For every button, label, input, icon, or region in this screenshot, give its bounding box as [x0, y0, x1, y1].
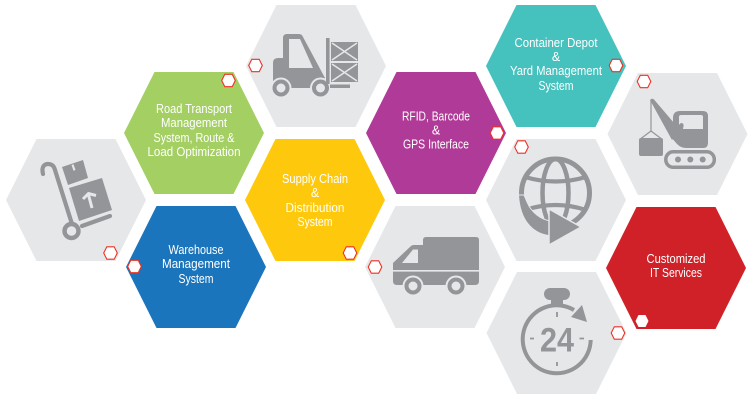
panel: 24 hour service [486, 272, 626, 394]
panel: forklift [246, 5, 386, 127]
marker [490, 127, 504, 139]
text: RFID barcode GPS: GPS Interface [403, 138, 469, 152]
text: supply chain and distribution system: System [298, 215, 332, 229]
text: warehouse management system: Warehouse [168, 243, 224, 257]
text: container depot and yard management: Container Depot [514, 36, 598, 50]
text: road transport management [148, 102, 241, 159]
icon: crane excavator [639, 98, 714, 167]
text: road transport management: Management [161, 116, 227, 130]
text: warehouse management system [162, 243, 230, 286]
panel: crane excavator [608, 73, 748, 195]
text: road transport management: System, Route & [154, 131, 235, 145]
marker [368, 261, 382, 273]
marker [249, 59, 262, 72]
text: container depot and yard management: System [538, 79, 574, 93]
panel: customized IT services [606, 207, 746, 329]
text: RFID barcode GPS: RFID, Barcode [402, 110, 470, 124]
text: container depot and yard management: Yard Management [510, 64, 602, 78]
marker [104, 247, 117, 259]
panel: container depot [486, 5, 626, 127]
text: customized IT services [646, 252, 706, 280]
text: road transport management: Road Transport [156, 102, 232, 116]
marker [636, 315, 648, 327]
text: supply chain and distribution system: Distribution [286, 201, 345, 215]
icon: delivery van [393, 237, 479, 296]
icon: globe with arrow [518, 159, 590, 245]
text: supply chain and distribution system [282, 172, 348, 229]
text: road transport management: Load Optimization [148, 145, 241, 159]
marker [343, 247, 357, 259]
text: customized IT services: Customized [646, 252, 706, 266]
icon: hand trolley with boxes [42, 160, 112, 238]
text: container depot and yard management [510, 36, 602, 93]
panel: warehouse management [126, 206, 266, 328]
panel: supply chain [245, 139, 385, 261]
text: supply chain and distribution system: & [311, 186, 320, 200]
text: container depot and yard management: & [552, 50, 561, 64]
marker [222, 74, 235, 87]
text: supply chain and distribution system: Supply Chain [282, 172, 348, 186]
panel: road transport [124, 72, 264, 194]
marker [609, 59, 623, 72]
text: customized IT services: IT Services [650, 266, 702, 280]
panel: hand trolley [6, 139, 146, 261]
panel: RFID [366, 72, 506, 194]
icon: 24 hour stopwatch: 24 [540, 322, 574, 360]
marker [128, 260, 141, 273]
text: warehouse management system: Management [162, 257, 230, 271]
panel: delivery van [365, 206, 505, 328]
text: RFID barcode GPS [402, 110, 470, 152]
marker [515, 141, 528, 153]
text: warehouse management system: System [178, 272, 214, 286]
marker [611, 327, 625, 339]
panel: global network [486, 139, 626, 261]
icon: forklift [270, 34, 358, 98]
marker [637, 75, 651, 88]
text: RFID barcode GPS: & [432, 124, 441, 138]
